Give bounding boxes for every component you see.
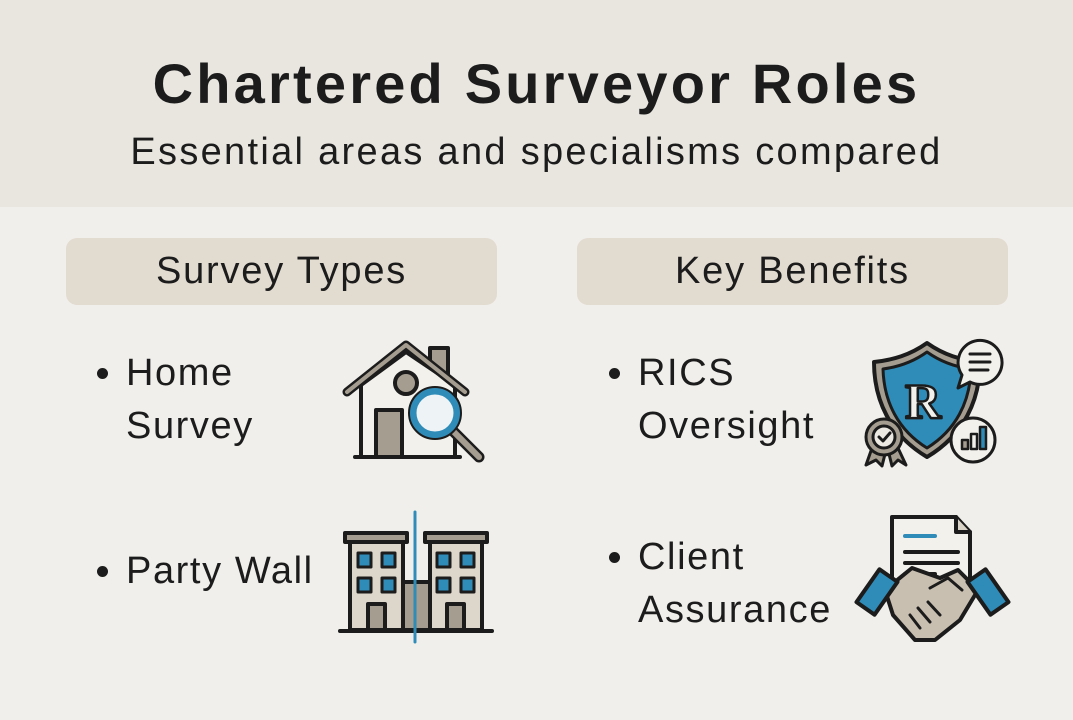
item: RICS Oversight: Oversight bbox=[638, 405, 815, 447]
heading: Key Benefits bbox=[577, 238, 1008, 305]
heading: Survey Types bbox=[66, 238, 497, 305]
heading: Survey Types: Survey Types bbox=[156, 250, 407, 292]
subtitle: Essential areas and specialisms compared bbox=[130, 131, 943, 173]
header band bbox=[0, 0, 1073, 207]
heading: Key Benefits: Key Benefits bbox=[675, 250, 910, 292]
item: RICS Oversight: RICS bbox=[638, 352, 735, 394]
icon: RICS shield: R bbox=[905, 373, 942, 429]
item: Home Survey bbox=[97, 352, 254, 447]
icon: party wall buildings bbox=[340, 512, 492, 642]
item: Home Survey: Home bbox=[126, 352, 234, 394]
item: Client Assurance: Assurance bbox=[638, 589, 832, 631]
item: Party Wall: Party Wall bbox=[126, 550, 314, 592]
title: Chartered Surveyor Roles bbox=[153, 52, 920, 115]
item: RICS Oversight bbox=[609, 352, 815, 447]
item: Client Assurance: Client bbox=[638, 536, 745, 578]
icon: RICS shield bbox=[866, 340, 1002, 466]
icon: handshake with document bbox=[857, 517, 1008, 640]
item: Client Assurance bbox=[609, 536, 832, 631]
icon: house with magnifier bbox=[347, 345, 479, 457]
item: Home Survey: Survey bbox=[126, 405, 254, 447]
